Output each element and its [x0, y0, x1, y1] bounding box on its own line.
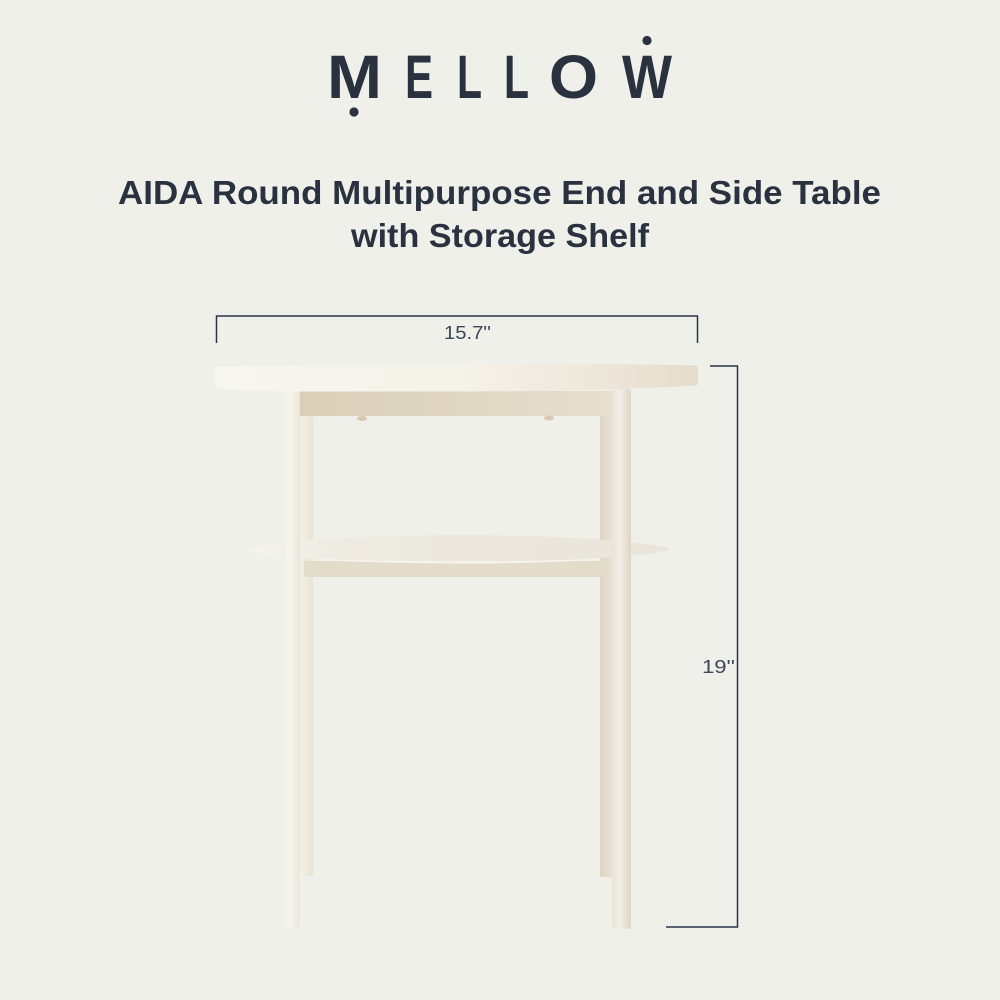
logo: MELLOW	[327, 36, 672, 117]
table top	[215, 364, 698, 392]
logo: MELLOW: L	[457, 43, 482, 111]
width label: 15.7''	[444, 323, 491, 343]
upper apron	[299, 391, 612, 416]
back right leg	[600, 416, 612, 877]
logo: MELLOW: O	[549, 43, 598, 111]
back left leg	[300, 416, 313, 876]
front right leg	[612, 389, 631, 929]
logo: MELLOW: M	[327, 43, 382, 111]
title: AIDA Round Multipurpose End and Side Table	[118, 174, 881, 211]
logo: MELLOW: L	[504, 43, 529, 111]
mounting screws	[357, 416, 554, 421]
width dimension bracket	[216, 316, 698, 343]
lower shelf	[248, 535, 669, 564]
front left leg	[281, 392, 300, 928]
title: with Storage Shelf	[350, 217, 650, 254]
height dimension bracket	[666, 366, 738, 927]
shelf underside highlight	[310, 559, 606, 564]
lower apron	[304, 561, 609, 577]
table photo	[215, 364, 698, 929]
height label: 19''	[702, 657, 735, 677]
logo: MELLOW: E	[405, 43, 433, 111]
title	[118, 174, 881, 254]
logo: MELLOW: W	[622, 43, 672, 111]
